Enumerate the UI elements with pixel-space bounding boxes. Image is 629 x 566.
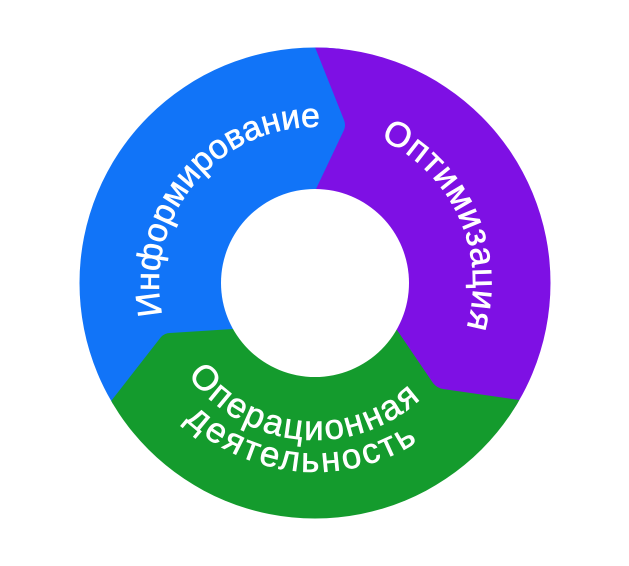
segment: Оптимизация (purple) bbox=[315, 48, 550, 410]
label: Операционная деятельность: Операционная bbox=[192, 365, 420, 447]
label: Информирование: Информирование bbox=[136, 108, 319, 316]
label: Оптимизация: Оптимизация bbox=[385, 122, 492, 330]
center hole bbox=[221, 189, 409, 377]
donut cycle diagram bbox=[80, 48, 550, 518]
label: Операционная деятельность bbox=[180, 365, 420, 472]
segment: Операционная деятельность (green) bbox=[111, 329, 520, 518]
ring segments bbox=[80, 48, 550, 518]
label: Операционная деятельность: деятельность bbox=[180, 410, 415, 472]
segment: Информирование (blue) bbox=[80, 48, 345, 404]
